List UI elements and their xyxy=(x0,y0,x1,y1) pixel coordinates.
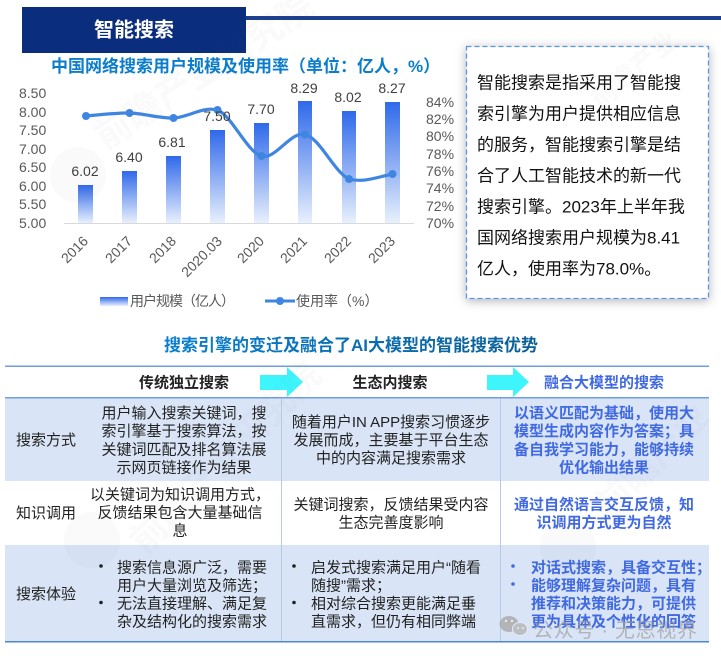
x axis labels: 2021 xyxy=(277,233,310,266)
watermark: research institute: 前瞻产业 xyxy=(585,25,684,115)
top rule xyxy=(246,16,721,20)
row: search experience: 用户大量浏览及筛选； xyxy=(117,578,267,594)
right axis labels xyxy=(426,94,454,231)
right axis labels: 72% xyxy=(426,198,454,214)
left axis labels: 6.00 xyxy=(19,178,46,194)
left axis labels: 7.00 xyxy=(19,141,46,157)
left axis labels: 5.00 xyxy=(19,215,46,231)
row labels: 搜索方式 xyxy=(16,432,76,449)
row: search experience xyxy=(99,558,711,630)
right axis labels: 76% xyxy=(426,163,454,179)
table header xyxy=(139,374,664,392)
arrow: traditional to ecosystem xyxy=(260,367,303,397)
bar value labels: 7.50 xyxy=(203,108,231,124)
right axis labels: 74% xyxy=(426,180,454,196)
legend: 用户规模（亿人） xyxy=(130,293,235,309)
bar value labels: 6.40 xyxy=(115,149,143,165)
bar value labels: 7.70 xyxy=(247,101,275,117)
legend xyxy=(100,293,378,309)
table header: 传统独立搜索 xyxy=(139,374,229,392)
x axis labels: 2016 xyxy=(58,233,91,266)
panel: definition text box: 搜索引擎。2023年上半年我 xyxy=(477,198,685,216)
row: search experience: 更为具体及个性化的回答 xyxy=(531,612,696,630)
row: search method: 备自我学习能力，能够持续 xyxy=(514,440,694,458)
row: knowledge retrieval: 关键词搜索，反馈结果受内容 xyxy=(293,496,489,514)
row: knowledge retrieval: 识调用方式更为自然 xyxy=(536,514,672,532)
right axis labels: 84% xyxy=(426,94,454,110)
header banner xyxy=(22,7,246,53)
row: search experience: 无法直接理解、满足复 xyxy=(117,594,267,612)
row: search experience: 搜索信息源广泛，需要 xyxy=(117,560,267,576)
row: search method: 关键词匹配及排名算法展 xyxy=(101,440,267,458)
x axis labels: 2020 xyxy=(234,233,267,266)
left axis labels: 8.50 xyxy=(19,85,46,101)
panel: definition text box: 智能搜索是指采用了智能搜 xyxy=(477,74,681,92)
bar value labels: 8.02 xyxy=(334,89,362,105)
panel: definition text box: 合了人工智能技术的新一代 xyxy=(477,166,681,186)
watermark: research institute: 前瞻产业 xyxy=(587,395,717,526)
row: search experience: 推荐和决策能力，可提供 xyxy=(531,594,696,612)
panel: definition text box xyxy=(466,46,708,298)
row: search experience: 启发式搜索满足用户“随看 xyxy=(311,560,481,576)
row: search method: 随着用户IN APP搜索习惯逐步 xyxy=(292,414,490,431)
row: knowledge retrieval xyxy=(90,486,694,540)
right axis labels: 70% xyxy=(426,215,454,231)
row: knowledge retrieval: 以关键词为知识调用方式， xyxy=(90,486,270,504)
x axis labels xyxy=(58,233,398,280)
row labels: 知识调用 xyxy=(16,505,76,522)
row: knowledge retrieval: 息 xyxy=(172,522,188,540)
row: search experience: 直需求，但仍有相同弊端 xyxy=(311,614,476,630)
row: search experience: 对话式搜索，具备交互性； xyxy=(531,558,711,576)
panel: definition text box: 国网络搜索用户规模为8.41 xyxy=(477,228,680,248)
row: search method: 以语义匹配为基础，使用大 xyxy=(514,404,694,422)
row labels xyxy=(16,432,76,603)
x axis labels: 2020.03 xyxy=(178,233,225,280)
right axis labels: 82% xyxy=(426,111,454,127)
row: knowledge retrieval: 生态完善度影响 xyxy=(338,514,444,532)
left axis labels: 6.50 xyxy=(19,159,46,175)
row: search experience: 随搜”需求； xyxy=(311,578,391,594)
row: search method: 中的内容满足搜索需求 xyxy=(316,450,466,467)
row: search method xyxy=(101,404,694,476)
bar value labels: 6.02 xyxy=(71,163,99,179)
chart title: 中国网络搜索用户规模及使用率（单位：亿人，%） xyxy=(51,56,440,76)
left axis labels: 7.50 xyxy=(19,122,46,138)
x axis labels: 2017 xyxy=(102,233,135,266)
bar value labels: 8.27 xyxy=(378,80,406,96)
row: knowledge retrieval: 通过自然语言交互反馈，知 xyxy=(514,496,694,514)
right axis labels: 80% xyxy=(426,128,454,144)
panel: definition text box: 索引擎为用户提供相应信息 xyxy=(477,104,681,124)
x axis labels: 2022 xyxy=(321,233,354,266)
row backgrounds xyxy=(5,398,709,481)
row labels: 搜索体验 xyxy=(16,586,76,603)
bars xyxy=(78,101,400,223)
row: search experience: 杂及结构化的搜索需求 xyxy=(117,614,267,630)
row: search method: 优化输出结果 xyxy=(559,458,649,476)
section title: 搜索引擎的变迁及融合了AI大模型的智能搜索优势 xyxy=(164,335,538,355)
table header: 生态内搜索 xyxy=(352,374,428,392)
legend: 使用率（%） xyxy=(296,293,378,309)
arrow: ecosystem to large model xyxy=(487,367,529,397)
x axis labels: 2018 xyxy=(146,233,179,266)
left axis labels: 8.00 xyxy=(19,104,46,120)
icon: wechat xyxy=(500,616,528,636)
right axis labels: 78% xyxy=(426,146,454,162)
watermark: research institute: 前瞻产业研究院 xyxy=(122,353,329,561)
header banner: 智能搜索 xyxy=(94,18,174,42)
row: search method: 用户输入搜索关键词，搜 xyxy=(101,405,267,422)
row: search method: 示网页链接作为结果 xyxy=(116,460,252,476)
left axis labels xyxy=(19,85,46,231)
row: search method: 索引擎基于搜索算法，按 xyxy=(101,422,267,440)
panel: definition text box: 亿人，使用率为78.0%。 xyxy=(477,258,661,278)
panel: definition text box: 的服务，智能搜索引擎是结 xyxy=(477,136,681,154)
bar value labels: 6.81 xyxy=(158,134,186,150)
bar value labels xyxy=(71,80,406,179)
bar value labels: 8.29 xyxy=(290,80,318,96)
wechat account watermark: 公众号 · 无思视界 xyxy=(533,619,697,642)
row: search experience: 相对综合搜索更能满足垂 xyxy=(311,596,476,612)
left axis labels: 5.50 xyxy=(19,196,46,212)
row: search method: 模型生成内容作为答案；具 xyxy=(514,422,694,440)
table: search engine evolution xyxy=(5,366,711,642)
x axis labels: 2023 xyxy=(365,233,398,266)
row: search method: 发展而成，主要基于平台生态 xyxy=(293,432,489,449)
table header: 融合大模型的搜索 xyxy=(544,374,664,392)
chart: search users and usage rate xyxy=(19,80,454,309)
row: search experience: 能够理解复杂问题，具有 xyxy=(531,576,696,594)
usage rate line xyxy=(82,106,396,183)
row: knowledge retrieval: 反馈结果包含大量基础信 xyxy=(97,504,263,522)
